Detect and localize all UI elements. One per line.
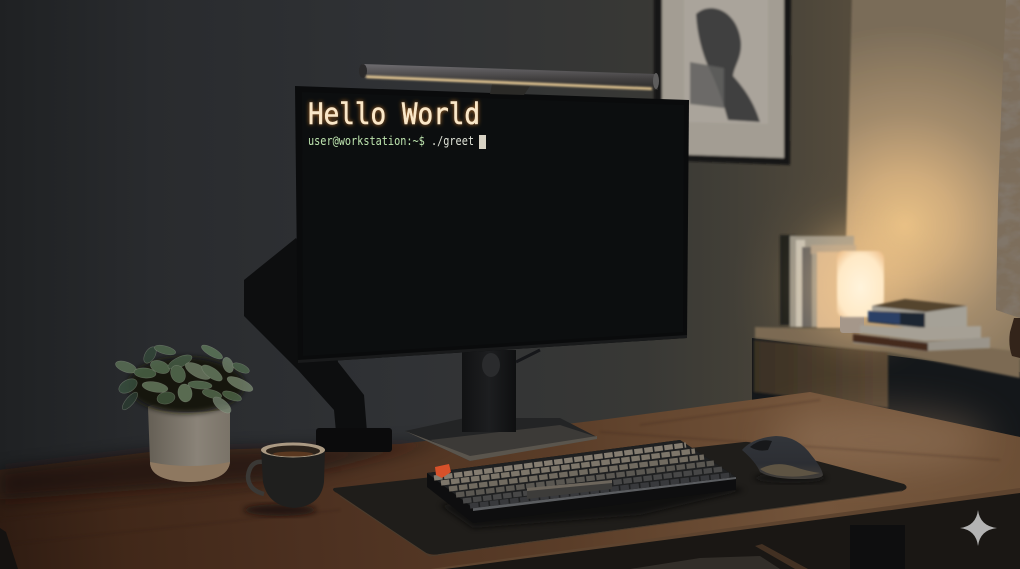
- sideboard: [752, 327, 1020, 440]
- stacked books: [853, 299, 990, 351]
- keyboard: [427, 440, 745, 528]
- mouse: [742, 436, 826, 483]
- olive wall glow: [680, 150, 880, 400]
- stone texture strip: [996, 0, 1020, 318]
- right warm wall: [846, 0, 1020, 360]
- monitor stand: [405, 350, 597, 461]
- sideboard body dark: [752, 338, 1020, 440]
- desk back shadow: [0, 440, 450, 500]
- sideboard drawer: [754, 340, 888, 408]
- watermark sparkle icon: [960, 510, 997, 546]
- framed picture: [654, 0, 791, 165]
- screen light bar: [359, 64, 659, 95]
- orange escape key: [435, 464, 451, 478]
- desk surface: [0, 392, 1020, 569]
- plant: [114, 343, 255, 482]
- pot: [148, 402, 230, 482]
- terminal cursor: [479, 135, 486, 149]
- monitor: [295, 86, 689, 363]
- monitor arm: [244, 238, 392, 452]
- sideboard top: [755, 327, 1020, 378]
- small dark vase: [1009, 318, 1020, 358]
- key rows: [434, 445, 731, 506]
- left corner dark object: [0, 528, 18, 569]
- lamp: [837, 251, 884, 333]
- terminal title: Hello World: [308, 97, 480, 131]
- desk mat: [333, 442, 907, 555]
- desk highlight: [770, 410, 990, 470]
- lamp glow: [810, 230, 910, 340]
- leaves: [114, 343, 255, 416]
- space bar: [527, 480, 612, 499]
- wood grain: [0, 400, 1000, 545]
- soil and leaf shadow: [128, 357, 244, 413]
- coffee cup: [244, 442, 325, 516]
- desk front edge: [430, 488, 1020, 569]
- under desk area: [430, 488, 1020, 569]
- terminal prompt: user@workstation:~$ ./greet: [308, 134, 474, 148]
- upright books: [780, 235, 856, 328]
